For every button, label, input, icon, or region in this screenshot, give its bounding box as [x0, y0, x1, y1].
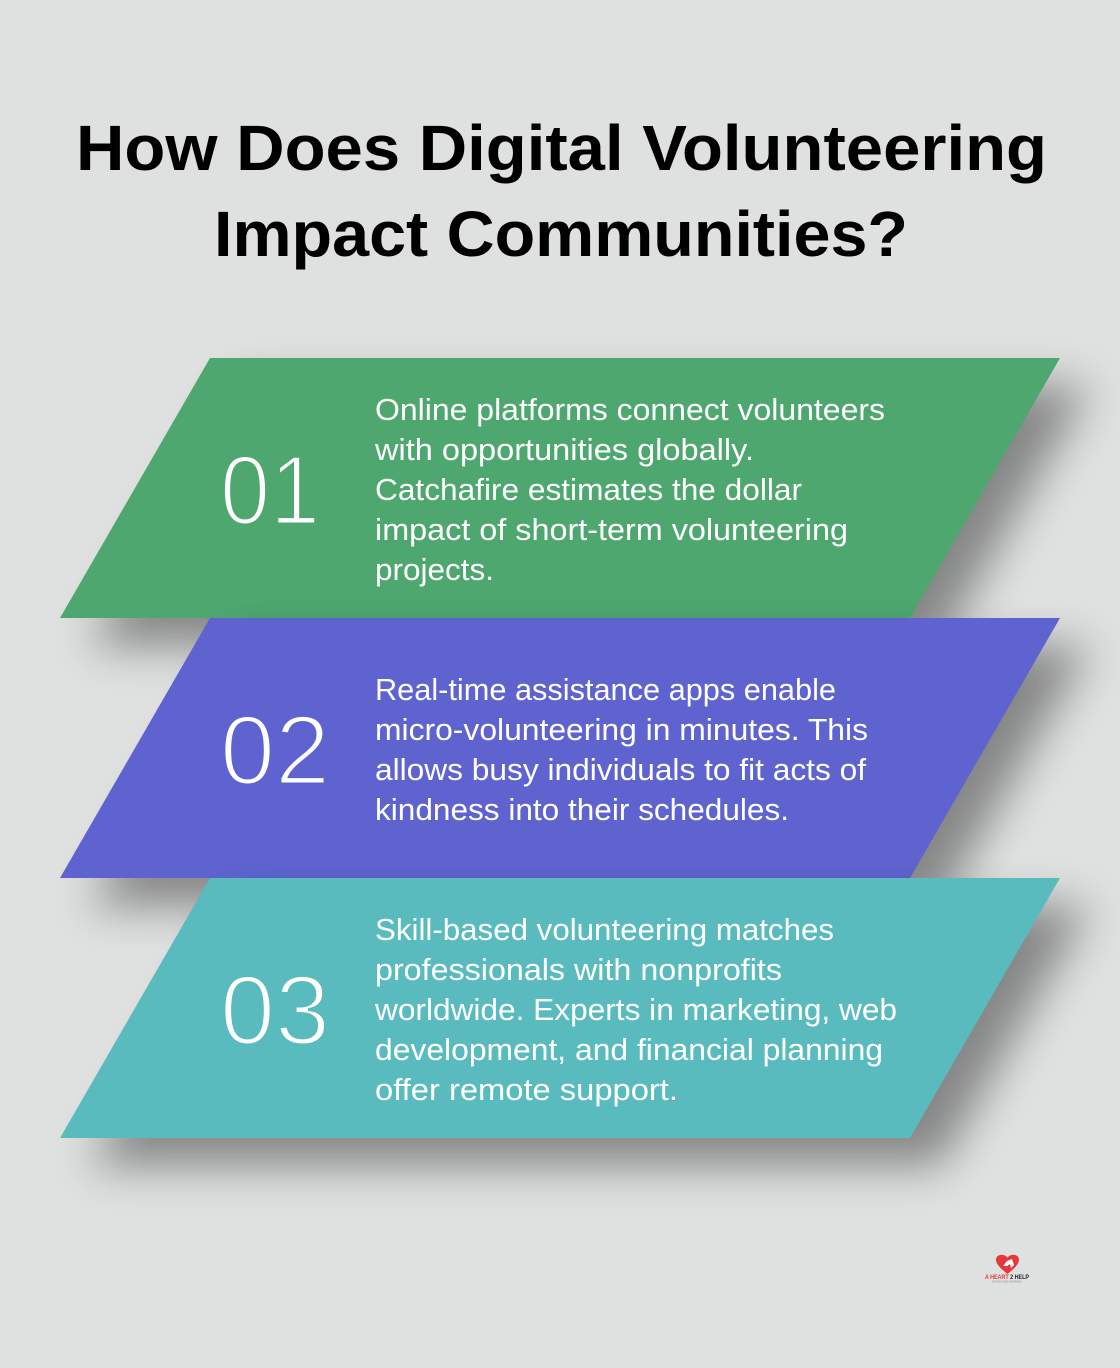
number 02: 02	[220, 695, 330, 805]
text: step 01 description: impact of short-term volunteering	[375, 512, 848, 547]
teal parallelogram	[60, 878, 1060, 1138]
text: step 03 description: professionals with nonprofits	[375, 952, 782, 987]
logo tagline: GIVING AND SHARING	[992, 1280, 1022, 1284]
text: step 02 description: allows busy individuals to fit acts of	[375, 752, 866, 787]
title	[76, 112, 1047, 270]
text: step 03 description: Skill-based volunteering matches	[375, 912, 834, 947]
text: step 03 description	[374, 912, 897, 1107]
panel: step 01	[60, 358, 1060, 618]
text: step 02 description: micro-volunteering in minutes. This	[375, 712, 868, 747]
icon: heart with hands	[996, 1255, 1019, 1274]
panel: step 02	[60, 618, 1060, 878]
logo: A Heart 2 Help	[985, 1255, 1030, 1284]
title: How Does Digital Volunteering	[76, 112, 1047, 184]
text: step 01 description	[374, 392, 885, 587]
text: step 02 description: Real-time assistance apps enable	[375, 672, 836, 707]
text: step 01 description: with opportunities globally.	[374, 432, 754, 467]
number 03: 03	[220, 955, 330, 1065]
text: step 03 description: development, and financial planning	[375, 1032, 883, 1067]
purple parallelogram	[60, 618, 1060, 878]
text: step 03 description: offer remote support.	[375, 1072, 678, 1107]
logo wordmark: A HEART 2 HELP	[985, 1274, 1030, 1281]
title: Impact Communities?	[214, 198, 908, 270]
green parallelogram	[60, 358, 1060, 618]
text: step 02 description: kindness into their schedules.	[375, 792, 789, 827]
text: step 03 description: worldwide. Experts in marketing, web	[374, 992, 897, 1027]
number 01: 01	[220, 435, 320, 545]
text: step 01 description: Catchafire estimates the dollar	[375, 472, 802, 507]
text: step 01 description: projects.	[375, 552, 494, 587]
panel: step 03	[60, 878, 1060, 1138]
text: step 01 description: Online platforms connect volunteers	[375, 392, 885, 427]
text: step 02 description	[375, 672, 868, 827]
